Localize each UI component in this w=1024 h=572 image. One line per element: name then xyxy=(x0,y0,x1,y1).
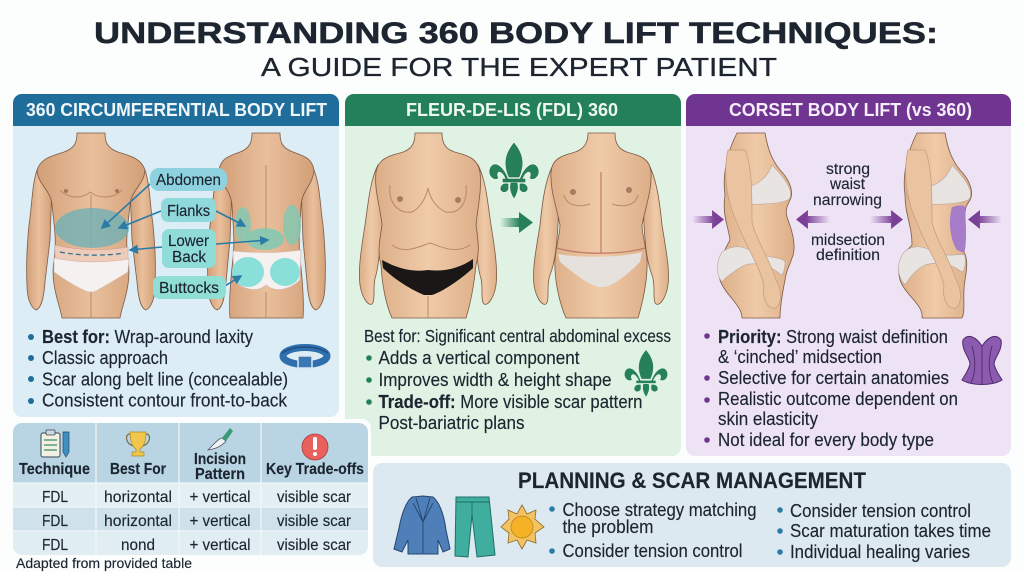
label: Buttocks: Buttocks xyxy=(159,280,219,297)
figure: male back xyxy=(208,133,325,318)
text: strong waist narrowing: waist xyxy=(829,176,866,193)
figure: side profile before xyxy=(718,133,794,318)
table header: Technique xyxy=(19,461,90,478)
table header: Key Trade-offs xyxy=(266,461,364,478)
text: midsection definition: definition xyxy=(816,247,880,264)
arrow: before to after xyxy=(500,212,533,233)
bullet list: corset: Priority: Strong waist definition xyxy=(718,327,948,347)
bullet list: planning left: Consider tension control xyxy=(562,541,742,561)
table header: Pattern xyxy=(195,466,245,483)
bullet list: planning right: Scar maturation takes time xyxy=(790,521,991,541)
bullet list: planning left: Choose strategy matching xyxy=(562,500,756,520)
label: Lower Back: Lower xyxy=(168,233,210,250)
table: technique comparison xyxy=(9,419,371,572)
table rows xyxy=(13,483,368,555)
label: Flanks: Flanks xyxy=(167,203,210,220)
panel heading: 360 circumferential xyxy=(13,94,339,126)
table rows: visible scar xyxy=(277,537,352,554)
icon: scalpel xyxy=(208,428,233,450)
text: strong waist narrowing: strong xyxy=(826,161,870,178)
bullet list: 360: Classic approach xyxy=(42,348,168,368)
bullet list: FDL: Best for: Significant central abdominal excess xyxy=(364,326,671,346)
figure: male front xyxy=(27,133,155,318)
table rows: FDL xyxy=(42,537,68,554)
bullet list: 360: Best for: Wrap-around laxity xyxy=(42,327,253,347)
text: midsection definition: midsection xyxy=(811,232,885,249)
table rows: horizontal xyxy=(104,513,172,530)
bullet list: FDL: Trade-off: More visible scar pattern xyxy=(378,392,642,412)
bullet list: FDL: Post-bariatric plans xyxy=(378,413,524,433)
bullet list: corset: Selective for certain anatomies xyxy=(718,368,949,388)
label: Abdomen: Abdomen xyxy=(156,172,221,189)
bullet list: FDL xyxy=(364,326,671,433)
panel heading: FDL xyxy=(345,94,681,126)
panel heading: corset xyxy=(686,94,1011,126)
panel: fleur-de-lis 360 xyxy=(345,94,681,456)
icon: alert xyxy=(302,434,328,460)
figure: before xyxy=(359,133,497,318)
table rows: horizontal xyxy=(104,489,172,506)
panel: 360 circumferential body lift xyxy=(13,94,339,417)
bullet list: planning right: Consider tension control xyxy=(790,501,971,521)
table rows: visible scar xyxy=(277,513,352,530)
label: Lower Back xyxy=(162,229,216,268)
title xyxy=(94,17,938,82)
bullet list: corset: & ‘cinched’ midsection xyxy=(718,347,882,367)
table header xyxy=(13,423,368,483)
bullet list: corset: skin elasticity xyxy=(718,409,818,429)
bullet list: 360: Scar along belt line (concealable) xyxy=(42,370,288,390)
panel: corset body lift xyxy=(686,94,1011,456)
icon: belt xyxy=(282,347,328,368)
icon: pants xyxy=(455,497,495,557)
icon: trophy xyxy=(127,432,149,456)
title: UNDERSTANDING 360 BODY LIFT TECHNIQUES: xyxy=(94,17,938,50)
panel heading: FDL: FLEUR-DE-LIS (FDL) 360 xyxy=(406,100,618,120)
icon: fleur-de-lis small xyxy=(625,350,667,397)
icon: fleur-de-lis large xyxy=(490,143,538,198)
table header: Incision xyxy=(194,451,246,468)
bullet list: FDL: Adds a vertical component xyxy=(378,348,580,368)
text: strong waist narrowing xyxy=(813,161,882,209)
panel heading: corset: CORSET BODY LIFT (vs 360) xyxy=(729,100,972,120)
bullet list: 360: Consistent contour front-to-back xyxy=(42,390,288,410)
figure: side profile after xyxy=(898,133,972,318)
table rows: visible scar xyxy=(277,489,352,506)
label: Abdomen xyxy=(150,168,227,191)
bullet list: planning right: Individual healing varies xyxy=(790,542,970,562)
table rows: + vertical xyxy=(190,513,250,530)
label: Buttocks xyxy=(153,276,226,299)
table rows: + vertical xyxy=(190,489,250,506)
bullet list: planning left: the problem xyxy=(562,517,654,537)
icon: clipboard and pen xyxy=(41,430,69,457)
icon: jacket xyxy=(394,496,450,554)
table rows: FDL xyxy=(42,489,68,506)
icon: corset xyxy=(962,336,1002,384)
bullet list: corset xyxy=(704,327,958,450)
label: Flanks xyxy=(161,198,216,222)
panel heading: planning: PLANNING & SCAR MANAGEMENT xyxy=(518,468,867,493)
bullet list: 360 xyxy=(28,327,288,410)
icon: sun xyxy=(501,505,544,549)
arrows: treatment zones xyxy=(102,184,268,286)
bullet list: corset: Not ideal for every body type xyxy=(718,430,934,450)
caption: table source: Adapted from provided table xyxy=(16,555,192,571)
bullet list: corset: Realistic outcome dependent on xyxy=(718,389,958,409)
bullet list: planning left xyxy=(549,500,756,561)
panel: planning and scar management xyxy=(373,463,1011,567)
bullet list: planning right xyxy=(777,501,991,562)
panel heading: 360 circumferential: 360 CIRCUMFERENTIAL BODY LIFT xyxy=(26,100,327,120)
table rows: FDL xyxy=(42,513,68,530)
text: strong waist narrowing: narrowing xyxy=(813,192,882,209)
bullet list: FDL: Improves width & height shape xyxy=(378,370,612,390)
label: Lower Back: Back xyxy=(172,249,207,266)
table rows: nond xyxy=(121,537,155,554)
text: midsection definition xyxy=(811,232,885,264)
figure: after xyxy=(533,133,669,318)
table header: Best For xyxy=(110,461,166,478)
arrows: waist compression xyxy=(692,210,1002,229)
table rows: + vertical xyxy=(190,537,250,554)
title: A GUIDE FOR THE EXPERT PATIENT xyxy=(261,52,777,82)
